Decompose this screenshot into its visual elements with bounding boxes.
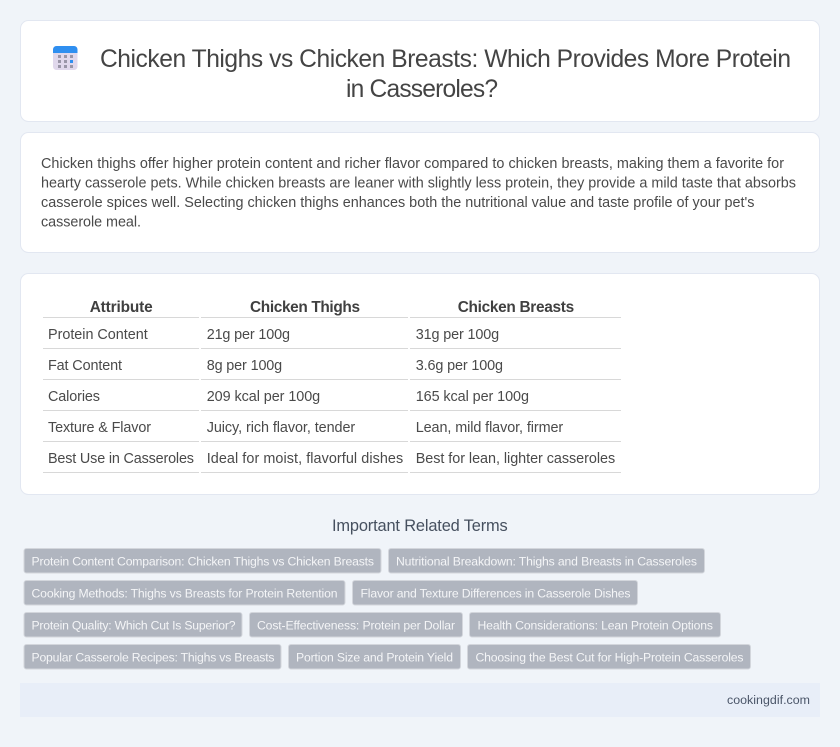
tag: Portion Size and Protein Yield	[296, 650, 453, 664]
footer source: cookingdif.com	[727, 693, 810, 707]
panel: comparison table card	[20, 274, 820, 494]
intro paragraph: hearty casserole pets. While chicken breasts are leaner with slightly less protein, they provide a mild taste that absorbs	[41, 176, 796, 192]
table header: Chicken Thighs	[250, 299, 360, 316]
row: best use in casseroles: Best Use in Casseroles	[48, 451, 194, 467]
row: protein content: Protein Content	[48, 327, 148, 343]
tag	[388, 548, 704, 573]
table header	[90, 299, 574, 316]
tag	[468, 644, 750, 669]
table header: Attribute	[90, 299, 153, 316]
row: texture and flavor: Lean, mild flavor, firmer	[416, 420, 563, 436]
intro paragraph: casserole spices well. Selecting chicken thighs enhances both the nutritional value and taste profile of your pet's	[41, 195, 754, 211]
icon: calendar	[53, 46, 78, 70]
tag	[24, 644, 281, 669]
row: protein content: 31g per 100g	[416, 327, 499, 343]
tag: Choosing the Best Cut for High-Protein Casseroles	[476, 650, 744, 664]
row: fat content: 8g per 100g	[207, 358, 282, 374]
row: best use in casseroles	[48, 451, 615, 467]
tag: Cost-Effectiveness: Protein per Dollar	[257, 618, 455, 632]
tag: Flavor and Texture Differences in Casserole Dishes	[360, 586, 630, 600]
tag: Popular Casserole Recipes: Thighs vs Breasts	[32, 650, 274, 664]
tag	[24, 548, 381, 573]
tag: Health Considerations: Lean Protein Options	[478, 618, 713, 632]
row: calories: 165 kcal per 100g	[416, 389, 529, 405]
row: protein content: 21g per 100g	[207, 327, 290, 343]
row: texture and flavor: Juicy, rich flavor, tender	[207, 420, 355, 436]
row: texture and flavor: Texture & Flavor	[48, 420, 151, 436]
tag: Protein Quality: Which Cut Is Superior?	[32, 618, 236, 632]
tag	[250, 612, 462, 637]
panel: intro text card	[20, 132, 820, 252]
intro paragraph: casserole meal.	[41, 214, 141, 230]
row: calories: Calories	[48, 389, 100, 405]
tag	[288, 644, 460, 669]
title: in Casseroles?	[346, 76, 498, 103]
tag	[24, 580, 345, 605]
row: protein content	[48, 327, 499, 343]
row: fat content	[48, 358, 503, 374]
row: best use in casseroles: Best for lean, lighter casseroles	[416, 451, 615, 467]
row: fat content: Fat Content	[48, 358, 122, 374]
row: fat content: 3.6g per 100g	[416, 358, 503, 374]
tag: Protein Content Comparison: Chicken Thighs vs Chicken Breasts	[32, 554, 374, 568]
heading: important related terms: Important Related Terms	[332, 517, 508, 535]
panel: title card	[20, 20, 820, 122]
row: calories: 209 kcal per 100g	[207, 389, 320, 405]
row: calories	[48, 389, 529, 405]
title: Chicken Thighs vs Chicken Breasts: Which Provides More Protein	[100, 46, 791, 73]
tag	[470, 612, 720, 637]
row: texture and flavor	[48, 420, 563, 436]
tag	[352, 580, 638, 605]
footer	[20, 683, 820, 717]
tag	[24, 612, 242, 637]
tag: Nutritional Breakdown: Thighs and Breasts in Casseroles	[396, 554, 697, 568]
intro paragraph: Chicken thighs offer higher protein content and richer flavor compared to chicken breasts, making them a favorite for	[41, 156, 784, 172]
table header: Chicken Breasts	[458, 299, 574, 316]
row: best use in casseroles: Ideal for moist, flavorful dishes	[207, 451, 403, 467]
tags: related terms	[24, 548, 750, 669]
tag: Cooking Methods: Thighs vs Breasts for Protein Retention	[32, 586, 338, 600]
